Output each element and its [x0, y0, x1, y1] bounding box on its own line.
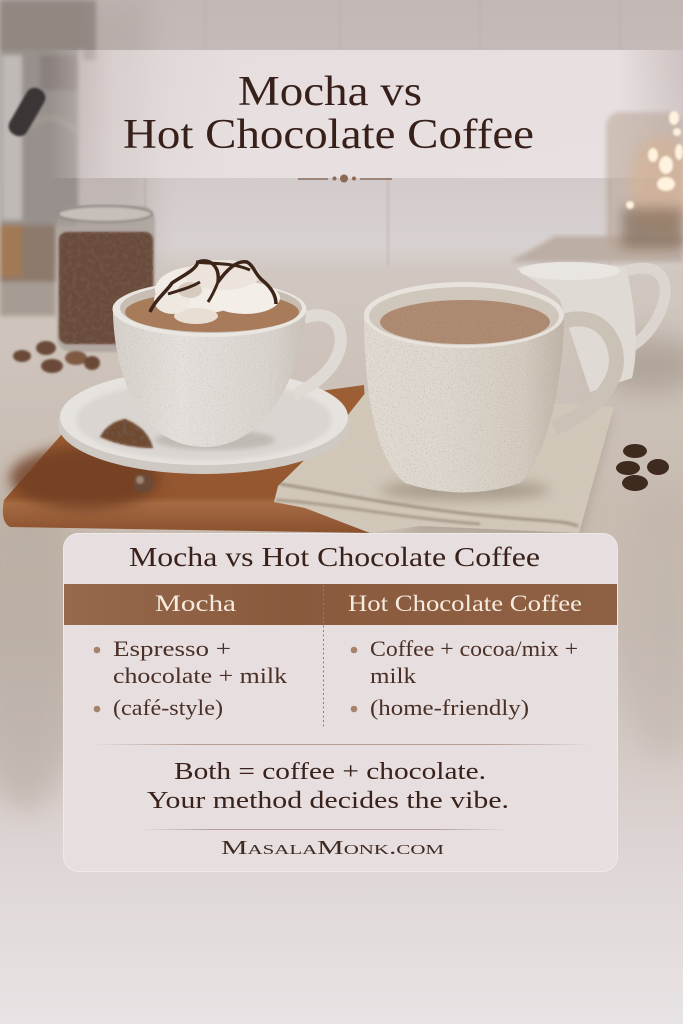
summary text: Both = coffee + chocolate.: [174, 759, 486, 785]
comparison card: [64, 534, 618, 872]
column: Hot Chocolate Coffee list: milk: [370, 663, 416, 688]
title: [123, 69, 534, 158]
milk jug: [516, 262, 665, 392]
column: Mocha list: [94, 636, 287, 720]
column heading: Hot Chocolate Coffee: Hot Chocolate Coffee: [348, 591, 582, 616]
side table, right: [510, 236, 683, 262]
hot chocolate coffee mug: [364, 282, 564, 492]
whipped cream with chocolate drizzle: [150, 260, 280, 324]
title: Hot Chocolate Coffee: [123, 112, 534, 158]
loose coffee beans, right: [616, 444, 669, 491]
title: Mocha vs: [238, 69, 422, 115]
handle of mocha cup: [294, 315, 341, 396]
title ornament: [298, 174, 392, 182]
espresso machine, blurred: [0, 0, 96, 316]
right candle jar with bokeh lights: [606, 111, 683, 252]
mocha cup body: [112, 281, 306, 447]
linen napkin: [274, 392, 614, 538]
column: Mocha list: chocolate + milk: [113, 663, 287, 688]
card heading: Mocha vs Hot Chocolate Coffee: [129, 542, 540, 572]
column: Hot Chocolate Coffee list: (home-friendly): [370, 695, 529, 720]
title banner: [50, 50, 683, 178]
saucer: [58, 369, 350, 474]
column heading: Mocha: Mocha: [155, 591, 236, 616]
cocoa pile on saucer: [100, 419, 153, 448]
column: Hot Chocolate Coffee list: [351, 636, 578, 720]
espresso machine handle: [5, 84, 49, 140]
coffee surface: [380, 300, 550, 344]
handle of hot chocolate mug: [554, 319, 616, 428]
summary text: Your method decides the vibe.: [147, 788, 509, 814]
jar of coffee beans: [57, 206, 155, 352]
table header band: [64, 584, 617, 625]
website credit: MasalaMonk.com: [221, 837, 445, 859]
column divider: [322, 585, 324, 728]
column: Mocha list: Espresso +: [113, 636, 231, 661]
loose coffee beans, left: [13, 341, 100, 373]
column: Mocha list: (café-style): [113, 695, 223, 720]
wooden board: [3, 385, 372, 533]
cocoa powder on board: [10, 446, 160, 510]
summary text: [147, 759, 509, 814]
mocha surface: [125, 292, 299, 332]
column: Hot Chocolate Coffee list: Coffee + cocoa/mix +: [370, 636, 578, 661]
